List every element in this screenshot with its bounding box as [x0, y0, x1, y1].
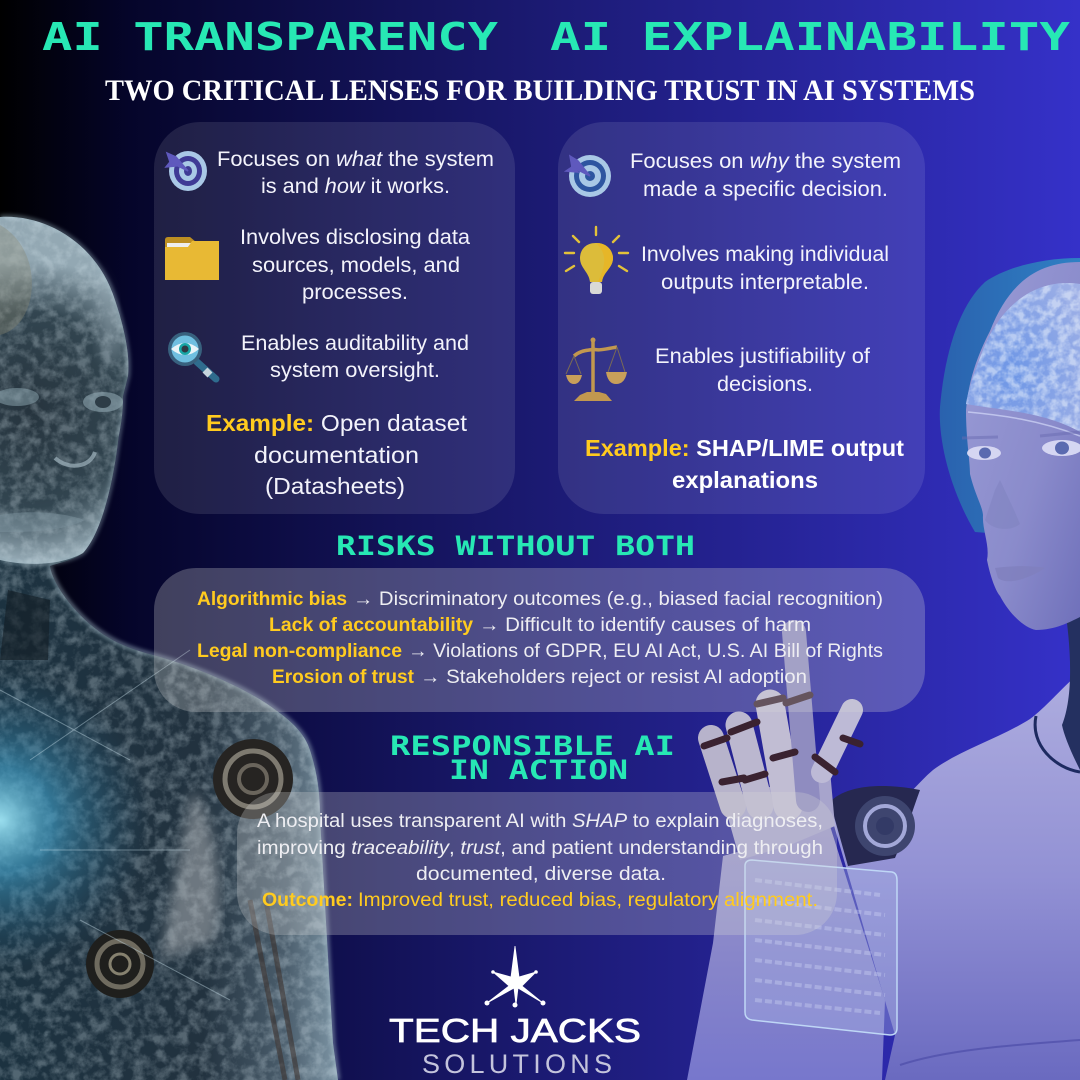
face	[966, 262, 1080, 630]
risk: lack of accountability: Lack of accountability	[269, 615, 473, 636]
title: AI Explainability: AI EXPLAINABILITY	[550, 15, 1070, 59]
panel: AI transparency: system oversight.	[270, 359, 440, 382]
shoulder armor	[830, 786, 920, 866]
icon: target with dart	[566, 155, 611, 197]
example narrative: A hospital uses transparent AI with SHAP to explain diagnoses,	[257, 811, 823, 832]
forearm and tablet arm	[687, 826, 885, 1080]
helmet glass	[940, 258, 1080, 540]
example text: (Datasheets)	[265, 473, 405, 499]
heading: responsible AI in action: IN ACTION	[449, 755, 628, 786]
outcome line: Outcome:	[262, 890, 353, 911]
text: involves making: Involves making individual	[641, 243, 889, 266]
panel: risks	[154, 568, 925, 712]
torso	[830, 672, 1080, 1080]
holographic tablet	[745, 860, 897, 1035]
logo star	[484, 946, 546, 1008]
risk: lack of accountability	[269, 615, 811, 636]
right robot illustration	[687, 258, 1080, 1080]
example narrative	[257, 811, 823, 885]
example text: Example: Open dataset	[206, 410, 467, 436]
risk: erosion of trust	[272, 667, 807, 688]
risk: legal non-compliance: Legal non-compliance	[197, 641, 402, 662]
left robot illustration	[0, 217, 338, 1080]
icon: balance scales	[566, 338, 627, 401]
hand and fingers	[704, 632, 860, 860]
logo wordmark: TECH JACKS	[389, 1012, 641, 1049]
logo: Tech Jacks Solutions	[389, 946, 641, 1079]
neck	[1062, 610, 1080, 770]
panel: AI explainability: made a specific decision.	[643, 178, 888, 201]
panel: AI explainability: decisions.	[717, 373, 813, 396]
text: focuses on what: Focuses on what the system	[217, 148, 494, 171]
icon: folder	[165, 237, 219, 280]
risk: legal non-compliance: → Violations of GDPR, EU AI Act, U.S. AI Bill of Rights	[408, 641, 883, 662]
panel: AI transparency: processes.	[302, 281, 408, 304]
text: involves disclosing: Involves disclosing data	[240, 226, 470, 249]
risk: algorithmic bias: Algorithmic bias	[197, 589, 347, 610]
example text: documentation	[254, 442, 419, 468]
heading: risks without both: RISKS WITHOUT BOTH	[336, 531, 695, 562]
risk: algorithmic bias: → Discriminatory outcomes (e.g., biased facial recognition)	[353, 589, 883, 610]
panel: AI explainability	[558, 122, 925, 514]
panel: AI explainability: outputs interpretable.	[661, 271, 869, 294]
text: enables justifiability: Enables justifiability of	[655, 345, 870, 368]
example text	[585, 435, 904, 493]
text: focuses on why: Focuses on why the system	[630, 150, 901, 173]
icon: magnifier with eye	[168, 332, 216, 379]
example text: Example: SHAP/LIME output	[585, 435, 904, 461]
heading: responsible AI in action: RESPONSIBLE AI	[390, 731, 675, 762]
outcome line: Improved trust, reduced bias, regulatory alignment.	[358, 890, 818, 911]
icon: light bulb	[565, 227, 628, 294]
panel: AI transparency: sources, models, and	[252, 254, 460, 277]
icon: target with dart	[166, 151, 207, 191]
example narrative: improving traceability , trust, and patient understanding through	[257, 838, 823, 859]
risk: erosion of trust: Erosion of trust	[272, 667, 415, 688]
title: AI Transparency: AI TRANSPARENCY	[42, 15, 498, 59]
panel: responsible AI example	[237, 792, 837, 935]
risk: legal non-compliance	[197, 641, 883, 662]
brain	[966, 283, 1080, 432]
risk: lack of accountability: → Difficult to identify causes of harm	[479, 615, 811, 636]
logo tagline: SOLUTIONS	[422, 1049, 612, 1079]
text: enables auditability: Enables auditability and	[241, 332, 469, 355]
subtitle: TWO CRITICAL LENSES FOR BUILDING TRUST IN AI SYSTEMS	[105, 74, 975, 107]
panel: AI transparency: is and how it works.	[261, 175, 450, 198]
example text	[206, 410, 467, 499]
risk: erosion of trust: → Stakeholders reject or resist AI adoption	[420, 667, 807, 688]
heading: responsible AI in action	[390, 731, 675, 786]
panel: AI transparency	[154, 122, 515, 514]
example text: explanations	[672, 467, 818, 493]
example narrative: documented, diverse data.	[416, 864, 666, 885]
